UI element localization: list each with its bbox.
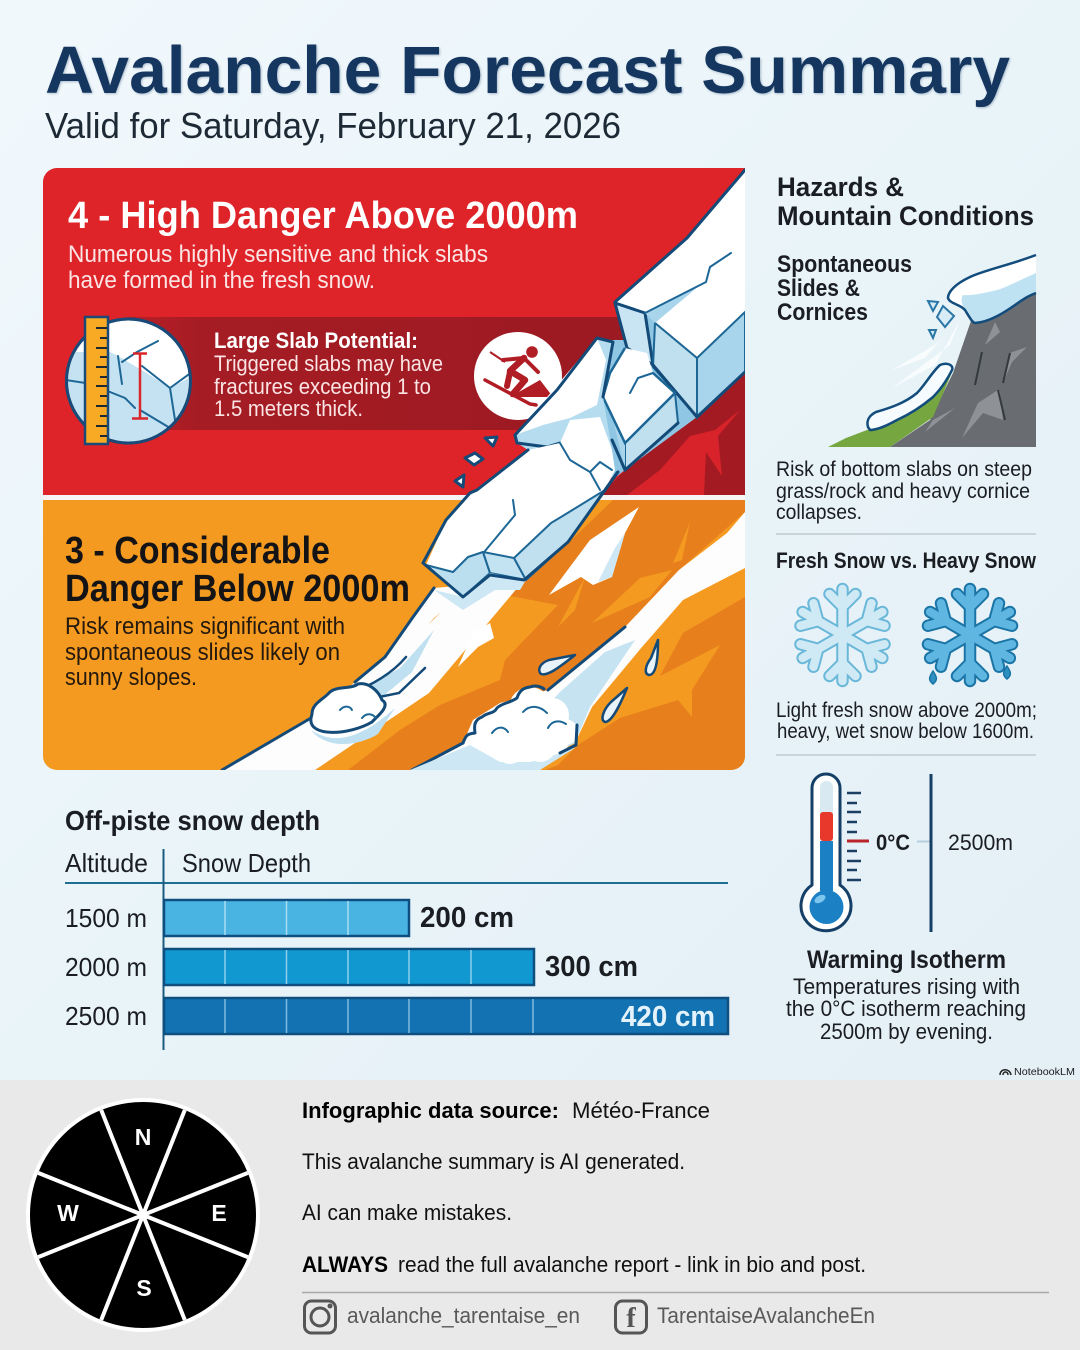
snow cloud one <box>311 684 395 744</box>
bar 1500 m <box>164 900 514 936</box>
spontaneous slides description: Risk of bottom slabs on steep <box>776 458 1032 481</box>
spontaneous slides description: grass/rock and heavy cornice <box>776 480 1030 503</box>
slab potential text: fractures exceeding 1 to <box>214 374 431 399</box>
dark slab potential band <box>128 317 628 430</box>
level 3 description: Risk remains significant with <box>65 613 345 640</box>
AI generated notice: This avalanche summary is AI generated. <box>302 1149 685 1174</box>
chart column headers: Altitude <box>65 848 148 878</box>
level 4 description <box>68 241 488 294</box>
chart column headers: Snow Depth <box>182 848 311 878</box>
red thickness marker <box>132 354 148 418</box>
data source: Météo-France <box>572 1098 710 1123</box>
level 3 description: spontaneous slides likely on <box>65 639 340 666</box>
snow comparison description: Light fresh snow above 2000m; <box>776 699 1037 722</box>
compass rose aspect wheel: E <box>211 1200 227 1226</box>
heading level 3: Danger Below 2000m <box>65 568 410 610</box>
freezing level label: 2500m <box>948 830 1013 855</box>
altitude labels: 2500 m <box>65 1001 147 1031</box>
spontaneous slides heading: Cornices <box>777 299 868 326</box>
snow comparison heading: Fresh Snow vs. Heavy Snow <box>776 548 1037 573</box>
freezing level label: 0°C <box>876 830 910 855</box>
hazards heading: Hazards & <box>777 172 904 202</box>
snow slab on grass <box>867 364 952 430</box>
facebook handle: f <box>626 1303 636 1334</box>
hazards heading: Mountain Conditions <box>777 201 1034 231</box>
lower slab block <box>423 417 618 610</box>
slab potential text: Large Slab Potential: <box>214 328 418 353</box>
heading level 3: 3 - Considerable <box>65 530 330 572</box>
compass rose aspect wheel: N <box>135 1124 151 1150</box>
bright red peak <box>627 410 740 495</box>
track two shading <box>554 640 635 747</box>
grass <box>828 370 953 447</box>
gap fill between slabs <box>604 314 696 478</box>
wind streaks <box>892 320 960 388</box>
ruler <box>85 317 108 444</box>
ice chunks <box>458 507 639 667</box>
spontaneous slides heading <box>777 251 912 326</box>
chart: off-piste snow depth <box>65 805 728 1050</box>
always read notice: read the full avalanche report - link in bio and post. <box>398 1252 866 1277</box>
snow track two <box>412 512 745 770</box>
track two outline <box>412 627 625 770</box>
slab potential text: 1.5 meters thick. <box>214 396 363 421</box>
slab potential text <box>214 328 443 421</box>
spontaneous slides description: collapses. <box>776 501 862 524</box>
altitude labels <box>65 903 147 1031</box>
snow comparison description: heavy, wet snow below 1600m. <box>777 720 1034 743</box>
avalanche illustration <box>222 170 745 770</box>
compass rose aspect wheel: W <box>57 1200 79 1226</box>
hazards heading <box>777 172 1034 231</box>
dark red slope <box>600 372 745 495</box>
light orange accents <box>558 522 690 627</box>
bar 2500 m: 420 cm <box>621 1001 715 1033</box>
altitude labels: 2000 m <box>65 952 147 982</box>
rock <box>890 293 1036 447</box>
heading level 4: 4 - High Danger Above 2000m <box>68 195 578 237</box>
level 4 description: have formed in the fresh snow. <box>68 267 375 294</box>
snow drops <box>539 640 658 722</box>
divider gap <box>43 495 745 500</box>
panel: danger level 3, orange <box>43 500 745 770</box>
heading level 3 <box>65 530 410 610</box>
bar 1500 m: 200 cm <box>420 902 514 934</box>
facebook handle: TarentaiseAvalancheEn <box>657 1303 875 1328</box>
icon: heavy wet snowflake <box>924 589 1016 684</box>
falling fragments <box>455 437 497 487</box>
right column: hazards <box>776 172 1037 1044</box>
spontaneous slides description <box>776 458 1032 524</box>
warming isotherm heading: Warming Isotherm <box>807 946 1006 974</box>
track shading and streaks <box>364 612 441 697</box>
middle slab block <box>603 348 678 470</box>
facebook handle <box>616 1301 875 1334</box>
data source: Infographic data source: <box>302 1098 559 1123</box>
illustration: cornice over rock and grass <box>828 255 1036 447</box>
chart heading: Off-piste snow depth <box>65 805 320 836</box>
spontaneous slides heading: Spontaneous <box>777 251 912 278</box>
instagram handle: avalanche_tarentaise_en <box>347 1303 580 1328</box>
compass rose aspect wheel: S <box>136 1275 152 1301</box>
bar 2000 m <box>164 949 638 985</box>
bar 2500 m <box>164 998 728 1034</box>
snow track one outline <box>222 588 434 770</box>
warming isotherm description: the 0°C isotherm reaching <box>786 996 1026 1021</box>
instagram handle <box>304 1301 580 1333</box>
panel: danger level 4, red <box>43 168 745 495</box>
chart column headers <box>65 848 311 878</box>
snow cloud two <box>410 686 578 770</box>
falling chunks <box>928 301 954 338</box>
always read notice: ALWAYS <box>302 1252 388 1277</box>
subtitle: date: Valid for Saturday, February 21, 2026 <box>45 105 621 146</box>
level 4 description: Numerous highly sensitive and thick slabs <box>68 241 488 268</box>
upper left slab block <box>515 338 613 450</box>
icon: slab thickness ruler <box>65 316 192 446</box>
level 3 description: sunny slopes. <box>65 664 197 691</box>
snow comparison description <box>776 699 1037 743</box>
spontaneous slides heading: Slides & <box>777 275 860 302</box>
altitude labels: 1500 m <box>65 903 147 933</box>
compass rose aspect wheel <box>28 1100 258 1330</box>
icon: skier <box>474 332 562 420</box>
snow track one <box>222 580 524 770</box>
warming isotherm description: 2500m by evening. <box>820 1019 993 1044</box>
title: Avalanche Forecast Summary <box>45 33 1010 108</box>
cornice <box>948 255 1036 323</box>
AI mistakes notice: AI can make mistakes. <box>302 1200 512 1225</box>
dark orange slopes <box>348 500 745 770</box>
upper slab block <box>615 170 745 417</box>
slab potential text: Triggered slabs may have <box>214 351 443 376</box>
data source <box>302 1098 710 1123</box>
icon: thermometer <box>801 774 869 931</box>
freezing level label <box>876 774 1013 932</box>
icon: light fresh snowflake <box>796 589 889 681</box>
level 3 description <box>65 613 345 691</box>
notebooklm mark: NotebookLM <box>1014 1066 1075 1078</box>
bar 2000 m: 300 cm <box>545 951 638 983</box>
warming isotherm description <box>786 974 1026 1044</box>
footer panel <box>0 1080 1080 1350</box>
warming isotherm description: Temperatures rising with <box>793 974 1020 999</box>
